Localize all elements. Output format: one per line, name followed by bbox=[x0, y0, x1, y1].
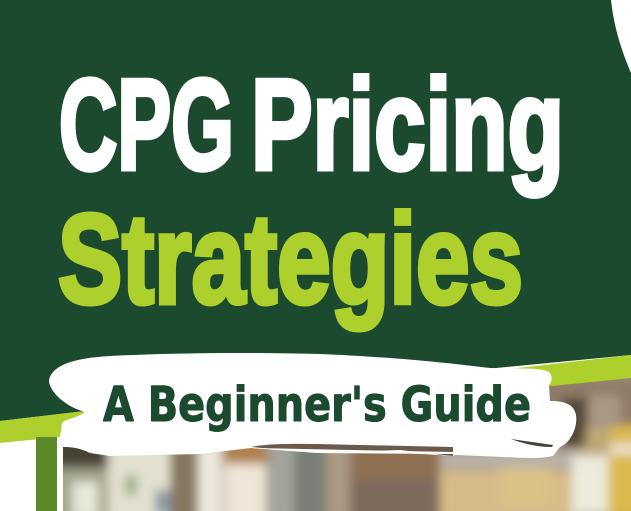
lime accent band bbox=[0, 411, 85, 443]
title line 1 bbox=[59, 53, 564, 197]
olive vertical bar bbox=[36, 437, 57, 511]
brush stroke streaks bbox=[251, 439, 553, 456]
title line 1: CPG bbox=[59, 53, 234, 197]
white brush stroke banner bbox=[49, 353, 576, 458]
subtitle: A Beginner's Guide bbox=[103, 377, 531, 433]
white corner shape bbox=[611, 0, 631, 73]
blurred supermarket shelf photo bbox=[40, 370, 631, 511]
